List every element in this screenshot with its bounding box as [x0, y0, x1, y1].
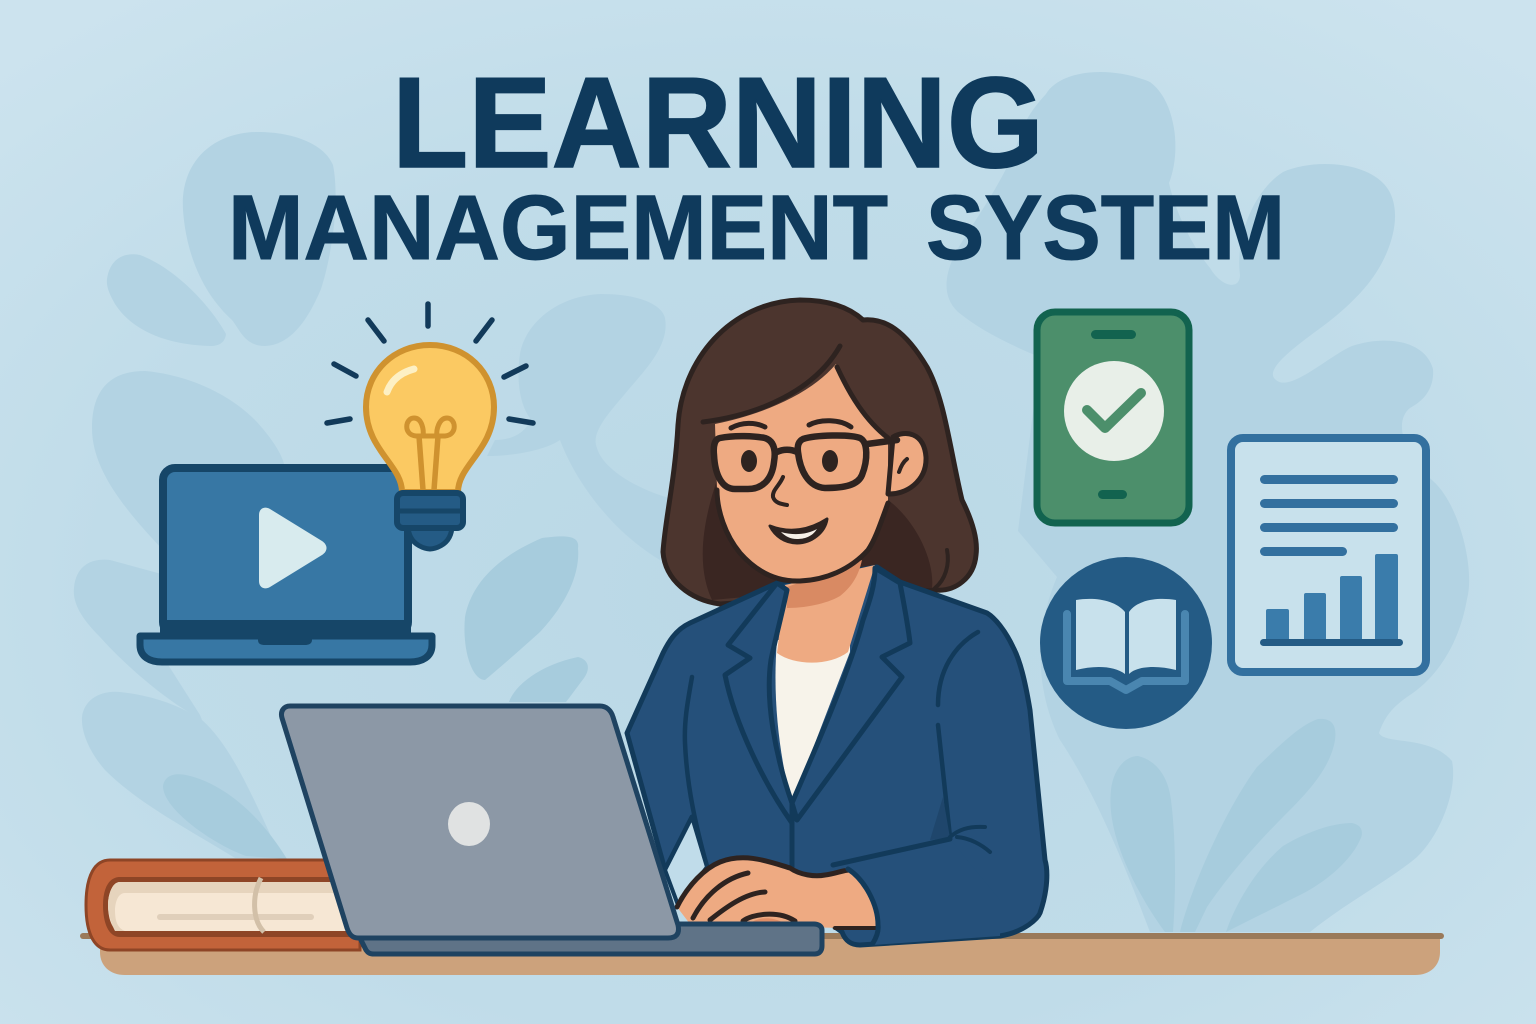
- icon: light bulb: [327, 304, 533, 549]
- title: [228, 51, 1285, 279]
- face: [715, 364, 888, 581]
- laptop logo: [448, 802, 490, 846]
- shirt: [775, 640, 850, 803]
- eyes: [741, 450, 757, 472]
- neck: [777, 565, 875, 663]
- glasses: [714, 435, 897, 489]
- title line: learning: LEARNING: [392, 51, 1044, 195]
- left arm seam: [665, 677, 707, 870]
- sleeve outline: [833, 839, 950, 943]
- silver laptop: [281, 706, 822, 954]
- eyebrows: [731, 421, 851, 428]
- icon: phone with check: [1037, 312, 1189, 523]
- icon: video laptop: [140, 468, 432, 662]
- jacket centre seam: [790, 823, 794, 868]
- title word: management: MANAGEMENT: [228, 177, 888, 279]
- icon: light rays: [327, 304, 533, 423]
- bar chart: [1260, 554, 1403, 646]
- sleeve cuff: [833, 839, 1000, 945]
- title word: system: SYSTEM: [926, 177, 1285, 279]
- right arm seams: [938, 632, 978, 837]
- mouth: [770, 519, 827, 543]
- hand: [677, 858, 878, 928]
- icon: book badge: [1040, 557, 1212, 729]
- ear: [888, 434, 926, 494]
- hair fringe lines: [703, 346, 888, 438]
- hair shadow: [703, 480, 932, 600]
- book on desk: [86, 860, 360, 950]
- person: [627, 300, 1047, 945]
- nose: [773, 477, 787, 505]
- background gap under arm: [665, 817, 707, 905]
- hair: [663, 300, 976, 604]
- lapels: [725, 583, 792, 823]
- desk: [80, 933, 1444, 975]
- jacket: [627, 567, 1047, 945]
- icon: report document: [1231, 438, 1426, 672]
- icon: play triangle: [259, 508, 326, 588]
